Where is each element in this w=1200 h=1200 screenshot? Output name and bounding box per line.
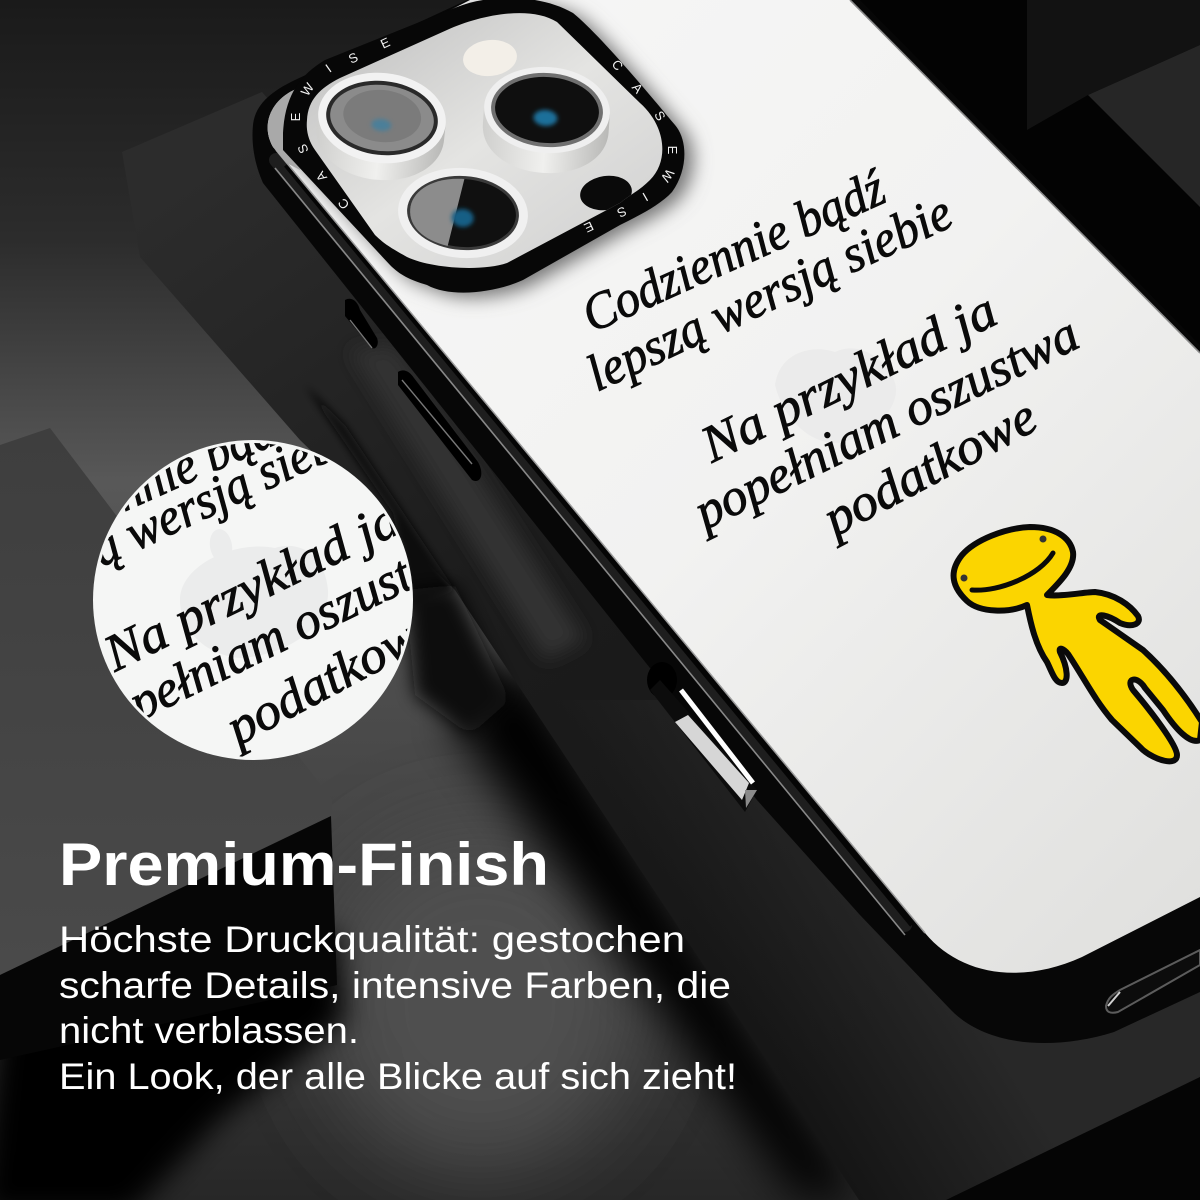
lens: left (312, 67, 450, 186)
raised plate top right (1088, 45, 1200, 207)
printed quote: podatkowe (810, 388, 1046, 550)
left block shadow side (0, 816, 345, 1200)
eyes (960, 536, 1046, 582)
description text: Höchste Druckqualität: gestochen (59, 919, 685, 960)
brand lettering right: S (651, 108, 669, 124)
brand lettering left: A (312, 168, 330, 184)
black backdrop top right (850, 0, 1200, 360)
lens: right (480, 63, 613, 177)
camera ring (283, 0, 684, 293)
flash (461, 37, 519, 79)
brand lettering left: I (323, 61, 334, 75)
dark fringe (450, 650, 859, 1200)
side buttons (345, 299, 481, 481)
brand lettering left (288, 34, 392, 212)
face highlight edge (276, 150, 925, 933)
camera bump (283, 0, 684, 293)
screen face (268, 0, 1200, 973)
charging port (1106, 950, 1200, 1013)
magnified quote: lepszą wersją siebie (0, 401, 376, 620)
brand lettering left: W (298, 79, 317, 99)
mute switch (345, 299, 378, 348)
brand lettering left: S (294, 142, 312, 156)
heading: Premium-Finish (59, 831, 549, 898)
description text: scharfe Details, intensive Farben, die (59, 965, 731, 1006)
yellow character (954, 527, 1200, 761)
phone case (252, 0, 1200, 1043)
brand lettering right: A (629, 80, 646, 97)
printed quote: Na przykład ja (691, 282, 1006, 474)
brand lettering right: W (658, 166, 677, 186)
microphone hole (580, 176, 632, 210)
gray glass strip (268, 90, 300, 170)
left block top (0, 428, 332, 975)
black strip behind circle (305, 385, 510, 735)
brand lettering right (582, 57, 680, 236)
description text (59, 919, 737, 1097)
lens: bottom (395, 164, 531, 262)
magnified quote (100, 443, 410, 757)
volume buttons (398, 370, 481, 481)
case body (252, 0, 1200, 1043)
brand lettering right: I (640, 189, 651, 204)
floor corner (946, 1077, 1200, 1200)
printed quote: lepszą wersją siebie (578, 184, 961, 403)
chrome edge (275, 160, 912, 935)
magnified apple logo (180, 527, 328, 658)
printed quote (574, 159, 1088, 550)
apple logo (775, 348, 896, 443)
magnified quote: Na przykład ja (94, 491, 409, 683)
brand lettering left: C (335, 195, 352, 212)
brand lettering right: E (665, 146, 680, 155)
brand lettering right: C (609, 57, 626, 74)
camera window (307, 13, 662, 268)
magnified quote: popełniam oszustwa (70, 519, 476, 757)
smile (972, 553, 1053, 590)
power button (647, 662, 757, 812)
brand lettering left: E (288, 112, 303, 121)
brand lettering left: S (346, 49, 360, 67)
brand lettering left: E (378, 34, 392, 52)
printed quote: Codziennie bądź (574, 159, 895, 344)
brand lettering right: E (582, 218, 596, 236)
camera shadow (292, 3, 693, 298)
description text: nicht verblassen. (59, 1010, 359, 1051)
magnifier circle (93, 440, 413, 760)
description text: Ein Look, der alle Blicke auf sich zieht! (59, 1056, 737, 1097)
printed quote: popełniam oszustwa (682, 305, 1088, 543)
brand lettering right: S (615, 203, 629, 221)
light band on block (350, 345, 585, 660)
magnified quote: podatkowe (213, 597, 449, 759)
